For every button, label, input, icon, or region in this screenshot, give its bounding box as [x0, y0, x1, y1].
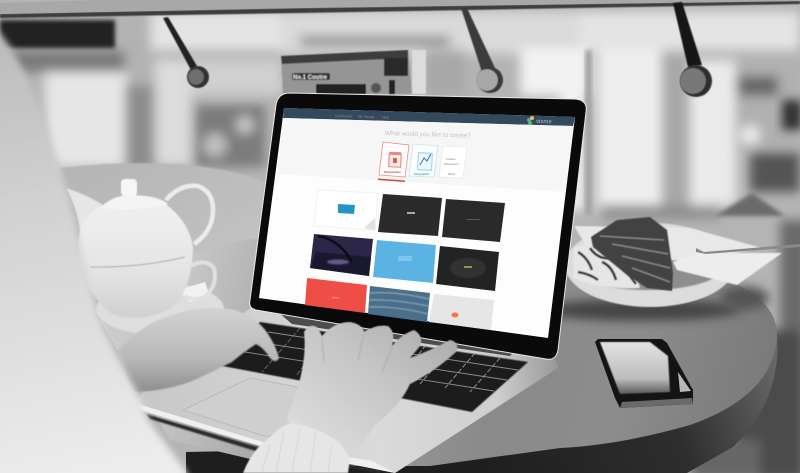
card: custom dimensions: Blank [448, 172, 456, 176]
card: custom dimensions: Dimensions [444, 162, 459, 166]
template: city bridge [310, 234, 373, 276]
plate [565, 223, 762, 307]
laptop hinge [278, 312, 513, 356]
teapot and cup body [78, 199, 193, 318]
trackpad [183, 378, 320, 437]
blurred sign behind laptop [281, 50, 426, 94]
card: infographic [409, 144, 438, 177]
card: presentation: Presentation [384, 170, 401, 174]
person's blurred shoulder and arm [0, 30, 187, 473]
table side [186, 335, 777, 473]
nav labels: Dashboard [335, 114, 352, 119]
app header bar [283, 108, 575, 126]
teapot spout [66, 188, 104, 232]
template: dark one [378, 194, 442, 236]
table top [100, 238, 777, 466]
nav labels [335, 114, 389, 120]
lamp two [461, 8, 503, 93]
cake [591, 217, 673, 291]
blurred sign behind laptop: No.1 Coutre [293, 75, 328, 81]
front edge highlight [138, 404, 395, 473]
template: blue [373, 240, 436, 283]
laptop base [135, 308, 558, 473]
saucer [96, 282, 224, 335]
nav labels: Help [382, 115, 389, 120]
cup handle [184, 262, 215, 299]
laptop lid [250, 93, 586, 359]
curved sofa [60, 163, 264, 270]
card: presentation [378, 142, 409, 182]
table shadow under laptop [146, 414, 380, 473]
logo [527, 116, 552, 125]
smartphone [595, 339, 693, 408]
template: sea [368, 286, 430, 322]
cup seam [90, 257, 185, 267]
upper panel [278, 118, 573, 192]
teapot lid [100, 195, 168, 209]
fork [696, 244, 800, 254]
laptop screen [259, 108, 575, 338]
heading: what would you like to create: What would you like to create? [385, 130, 471, 140]
template: australia [429, 294, 494, 330]
lid knob [121, 179, 137, 196]
round table [100, 238, 777, 473]
keyboard [217, 322, 528, 412]
template: blank [314, 190, 378, 230]
lamp one [163, 17, 209, 88]
teapot handle [166, 186, 213, 244]
template grid [305, 190, 505, 330]
hanging lamps [163, 2, 712, 97]
template: dark two [442, 199, 505, 242]
lamp three [673, 2, 712, 97]
left hand [118, 308, 279, 392]
top beam [0, 0, 800, 18]
shadow below plate [540, 299, 740, 321]
right hand [286, 322, 457, 458]
card: custom dimensions: Custom [446, 157, 456, 161]
cream [573, 243, 640, 288]
napkin [673, 253, 782, 285]
template: dark map [436, 246, 499, 291]
template: red [305, 278, 367, 313]
card: infographic: Infographic [414, 172, 430, 176]
nav labels: My Visuals [358, 115, 375, 119]
logo: visme [536, 119, 552, 125]
card: custom dimensions [439, 146, 467, 178]
knitted shirt cuff [243, 423, 350, 473]
plate with cake [565, 217, 800, 307]
laptop [135, 93, 586, 473]
teapot and cup [66, 179, 215, 318]
